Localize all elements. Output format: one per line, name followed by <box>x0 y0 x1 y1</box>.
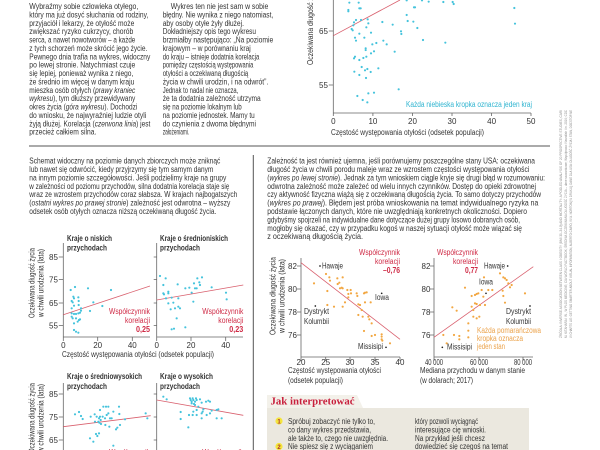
chart: main scatter of all countries: 10 <box>368 117 378 126</box>
text: tips: który pozwoli wyciągnąć <box>415 417 478 426</box>
chart: low income countries: Kraje o niskich <box>67 234 112 243</box>
chart: US states obesity vs life expectancy: –0,76 <box>383 266 400 275</box>
text: intro column left: żyją dłużej. Korelacja (czerwona linia) jest <box>29 119 151 128</box>
chart: low income countries: Współczynnik <box>109 307 151 316</box>
text: USA states paragraph: (wykres po prawej). Błędem jest próba wnioskowania na temat indywidualnego ryzyka na <box>267 199 539 208</box>
text: vertical credits <box>558 110 573 338</box>
text: intro column left: który ma już dosyć słuchania od rodziny, <box>29 10 148 19</box>
chart: upper-middle income countries: Kraje o średniowysokich <box>67 372 142 381</box>
chart: lower-middle income countries: przychodach <box>160 244 200 252</box>
chart: lower-middle income countries: Kraje o średnioniskich <box>160 234 228 243</box>
text: intro column right: Dokładniejszy opis tego wykresu <box>163 27 256 36</box>
chart: US states income vs life expectancy: 76 <box>422 331 431 340</box>
chart: US states income vs life expectancy: 40 000 <box>425 358 443 367</box>
chart: low income countries: 85 <box>49 253 58 262</box>
text: small multiples intro: odsetek osób otyłych oznacza niższą oczekiwaną długość życia. <box>29 207 216 216</box>
chart: US states income vs life expectancy: Iowa <box>479 278 493 286</box>
chart: low income countries: Oczekiwana długość życia <box>28 248 36 318</box>
chart: main scatter of all countries: 30 <box>448 117 457 126</box>
chart: main scatter of all countries <box>306 0 536 137</box>
text: USA states paragraph: podstawie łączonych danych, które nie uwzględniają konkretnych okoliczności. Dopiero <box>267 207 527 216</box>
text: tips: Spróbuj zobaczyć nie tylko to, <box>288 417 375 426</box>
text: vertical credits: W CHARTS LIE: GETTING SMARTER ABOUT VISUAL INFORMATION, ALBERTO CAIRO, W.W. NORTON [W DRUKU]; DANE DLA USA: DŁUGOŚĆ ŻYCIA I STAN, DOCSTOP.NE <box>568 110 573 338</box>
chart: upper-middle income countries: 65 <box>49 436 58 445</box>
chart: US states income vs life expectancy: Każda pomarańczowa <box>477 326 541 335</box>
chart: upper-middle income countries: 75 <box>49 413 58 422</box>
chart: US states income vs life expectancy: jeden stan <box>476 342 505 351</box>
chart: US states income vs life expectancy: Hawaje <box>484 262 505 270</box>
chart: US states income vs life expectancy <box>420 248 541 385</box>
text: USA states paragraph: Zależność ta jest również ujemna, jeśli porównujemy poszczególne stany USA: oczekiwana <box>267 156 535 166</box>
chart: lower-middle income countries: Współczynnik <box>202 307 244 316</box>
text: tips: Na przykład jeśli chcesz <box>415 434 485 443</box>
text: intro column right: pomiędzy częstością występowania <box>163 61 254 70</box>
chart: US states income vs life expectancy: 80 000 <box>514 358 532 367</box>
text: small multiples intro: (ostatni wykres po prawej stronie) zależność jest odwrotna – wyższy <box>29 199 230 208</box>
chart: US states income vs life expectancy: Missisipi <box>447 342 472 352</box>
chart: US states obesity vs life expectancy: 80 <box>288 285 297 294</box>
chart: high income countries: przychodach <box>160 382 200 391</box>
chart: US states obesity vs life expectancy: 82 <box>288 262 297 271</box>
text: vertical credits: M. KITAHARA I IN., W PLOS MEDICINE; CIA WORLD FACTBOOK; ŚREDNIA OCZEKIWANA DŁUGOŚĆ ŻYCIA – dane szacunkowe; Współpraca: Nasrullah i in. 2016; CDC <box>563 110 568 338</box>
chart: US states obesity vs life expectancy: Współczynnik <box>359 248 401 257</box>
text: USA states paragraph: gdybyśmy spojrzeli na indywidualne dane dotyczące dużej grupy losowo dobranych osób, <box>267 215 520 224</box>
text: small multiples intro: Schemat widoczny na poziomie danych zbiorczych może zniknąć <box>29 156 220 166</box>
text: intro column right: otyłości a oczekiwaną długością <box>163 69 249 78</box>
icon: number 1: 1 <box>277 419 281 425</box>
chart: US states obesity vs life expectancy: Częstość występowania otyłości <box>288 366 381 375</box>
chart: low income countries: 75 <box>49 276 58 284</box>
chart: US states obesity vs life expectancy: (odsetek populacji) <box>288 376 343 385</box>
chart: US states obesity vs life expectancy: Missisipi <box>358 342 383 351</box>
chart: US states income vs life expectancy: korelacji <box>453 257 478 266</box>
chart: US states obesity vs life expectancy: 40 <box>396 358 405 367</box>
text: small multiples intro: wraz ze wzrostem przychodów coraz słabsza. W krajach najbogatszych <box>28 190 237 199</box>
text: intro column left: zwiększać ryzyko cukrzycy, chorób <box>29 27 134 36</box>
text: intro column left: do wniosku, że najwyraźniej ludzie otyli <box>29 111 146 120</box>
text: intro column right: Jednak to nadal nie oznacza, <box>163 86 238 95</box>
text: tips: ale także to, czego nie uwzględnia. <box>288 434 388 443</box>
chart: main scatter of all countries: 0 <box>331 117 336 126</box>
text: intro column right: Wykres ten nie jest sam w sobie <box>171 2 269 11</box>
chart: US states income vs life expectancy: (w dolarach; 2017) <box>420 376 473 385</box>
text: tips <box>288 417 509 450</box>
text: small multiples intro: na innym poziomie szczegółowości. Jeśli podzielimy kraje na grupy <box>29 173 226 182</box>
text: intro column right: aby osoby otyłe żyły dłużej. <box>163 19 244 28</box>
chart: upper-middle income countries <box>28 372 151 450</box>
text: intro column left: z tych schorzeń może skrócić jego życie. <box>29 44 147 53</box>
text: USA states paragraph: długość życia w chwili porodu maleje wraz ze wzrostem częstości występowania otyłości <box>267 165 529 174</box>
chart: upper-middle income countries: 85 <box>49 390 58 399</box>
text: intro column left: Pewnego dnia trafia na wykres, widoczny <box>29 52 150 61</box>
divider <box>29 145 550 147</box>
text: intro column left: przecież całkiem silna. <box>29 128 96 137</box>
chart: US states obesity vs life expectancy: Oczekiwana długość życia <box>268 257 278 335</box>
text: intro column left: po lewej stronie. Natychmiast czuje <box>29 61 136 70</box>
text: intro column left: serca, a nawet nowotworów – a każde <box>29 36 136 44</box>
text: intro column right <box>163 2 274 137</box>
icon: number 2 <box>275 443 283 450</box>
chart: main scatter of all countries: Każda niebieska kropka oznacza jeden kraj <box>406 100 532 109</box>
chart: US states obesity vs life expectancy: 25 <box>321 358 331 367</box>
text: intro column left: wykresu), tym dłuższy przewidywany <box>29 94 135 103</box>
chart: lower-middle income countries: korelacji <box>218 316 243 325</box>
chart: main scatter of all countries: 20 <box>408 117 417 126</box>
chart: US states obesity vs life expectancy <box>268 248 405 385</box>
text: intro column left: przyjaciół i lekarzy, że otyłość może <box>29 19 135 28</box>
text: intro column right: do kraju – istnieje dodatnia korelacja <box>163 52 260 61</box>
chart: US states income vs life expectancy: kropka oznacza <box>477 334 523 343</box>
chart: US states obesity vs life expectancy: Dystrykt <box>304 307 330 316</box>
text: intro column right: że ta dodatnia zależność utrzyma <box>163 94 261 103</box>
chart: US states obesity vs life expectancy: 35 <box>371 358 380 367</box>
chart: main scatter of all countries: 40 <box>487 117 497 126</box>
text: USA states paragraph: czy aktywność fizyczna wiążą się z oczekiwaną długością życia. To samo dotyczy przychodów <box>267 190 541 199</box>
chart: upper-middle income countries: w chwili urodzenia (lata) <box>36 384 46 450</box>
chart: high income countries: Kraje o wysokich <box>160 372 213 381</box>
chart: low income countries: 55 <box>49 322 58 330</box>
text: intro column left: się lepiej, ponieważ wynika z niego, <box>29 69 133 78</box>
chart: lower-middle income countries: 20 <box>187 341 196 350</box>
icon: number 1 <box>275 417 283 425</box>
chart: US states obesity vs life expectancy: Iowa <box>375 293 389 302</box>
chart: US states income vs life expectancy: 80 <box>422 285 431 294</box>
text: USA states paragraph: odwrotna zależność może zależeć od wielu innych czynników. Dostęp do opieki zdrowotnej <box>267 182 536 191</box>
text: intro column right: założeniami. <box>163 128 189 137</box>
chart: low income countries: 65 <box>49 299 58 308</box>
text: tips: co dany wykres przedstawia, <box>288 425 371 434</box>
chart: US states income vs life expectancy: Kolumbii <box>506 317 531 326</box>
text: intro column right: krajowym – w porównaniu kraj <box>163 44 251 53</box>
text: intro column right: do czynienia z dwoma błędnymi <box>163 119 256 128</box>
chart: low income countries: w chwili urodzenia (lata) <box>36 249 46 318</box>
text: intro column left: Wybraźmy sobie człowieka otyłego, <box>29 2 138 11</box>
text: intro column left: okres życia (góra wykresu). Dochodzi <box>29 103 137 112</box>
chart: lower-middle income countries: 0 <box>154 341 159 350</box>
chart: low income countries: 40 <box>128 341 137 350</box>
chart: low income countries: 0 <box>61 341 66 350</box>
chart: lower-middle income countries: 40 <box>221 341 231 350</box>
chart: US states obesity vs life expectancy: 78 <box>288 308 297 317</box>
text: intro column right: na poziomie jednostek. Mamy tu <box>163 111 255 120</box>
text: intro column right: życia w chwili urodzin, i na odwrót”. <box>163 77 268 86</box>
text: intro column left: że średnio im więcej w danym kraju <box>29 77 134 86</box>
chart: US states obesity vs life expectancy: Hawaje <box>322 262 343 270</box>
chart: main scatter of all countries: 50 <box>527 117 536 126</box>
axis label: small multiples x axis: Częstość występowania otyłości (odsetek populacji) <box>62 350 214 359</box>
chart: lower-middle income countries: 0,23 <box>229 325 244 334</box>
chart: US states obesity vs life expectancy: 76 <box>288 331 297 340</box>
text: intro column right: błędny. Nie wynika z niego natomiast, <box>163 10 273 19</box>
text: USA states paragraph <box>267 156 545 241</box>
chart: US states obesity vs life expectancy: 20 <box>297 358 306 367</box>
chart: US states income vs life expectancy: Dystrykt <box>506 307 532 316</box>
chart: US states obesity vs life expectancy: Kolumbii <box>304 317 329 326</box>
chart: US states income vs life expectancy: Współczynnik <box>437 248 479 257</box>
chart: low income countries: 0,25 <box>136 325 150 334</box>
text: small multiples intro: w zależności od poziomu przychodów, silna dodatnia korelacja staje się <box>29 182 230 191</box>
chart: US states income vs life expectancy: Mediana przychodu w danym stanie <box>420 366 525 375</box>
text: tips: interesujące cię wnioski. <box>415 425 486 434</box>
text: intro column left <box>29 2 151 137</box>
chart: main scatter of all countries: 65 <box>319 27 328 36</box>
text: USA states paragraph: (wykres po lewej stronie). Jednak za tym wnioskiem ciągle kryje się drugi błąd w rozumowaniu: <box>267 173 545 182</box>
heading: box title: Jak interpretować <box>270 396 355 408</box>
chart: US states income vs life expectancy: 0,77 <box>465 266 478 275</box>
text: intro column right: się na poziomie lokalnym lub <box>163 103 242 112</box>
text: USA states paragraph: z oczekiwaną długością życia. <box>267 232 363 241</box>
text: small multiples intro <box>28 156 237 216</box>
chart: US states income vs life expectancy: 82 <box>422 262 431 271</box>
text: vertical credits: ŹRÓDŁA: INVERSE ASSOCIATION BETWEEN CLASS I OBESITY (BMI 30–34.9) AND MORTALITY: A POOLED ANALYSIS OF 20 PROSPECTIVE STUDIES, CARI <box>558 110 563 338</box>
text: USA states paragraph: mogłoby się okazać, czy w przypadku kogoś w naszej sytuacji otyłość może wiązać się <box>267 224 522 233</box>
chart: US states obesity vs life expectancy: w chwili urodzenia (lata) <box>278 259 286 334</box>
chart: upper-middle income countries: przychodach <box>67 382 107 391</box>
chart: lower-middle income countries <box>154 234 244 350</box>
chart: US states income vs life expectancy: 78 <box>422 308 431 317</box>
chart: main scatter of all countries: Częstość występowania otyłości (odsetek populacji) <box>331 128 484 137</box>
chart: low income countries: przychodach <box>67 244 107 252</box>
chart: main scatter of all countries: 55 <box>319 81 328 90</box>
panel: how to interpret <box>267 395 529 450</box>
chart: US states obesity vs life expectancy: korelacji <box>375 257 400 266</box>
chart: US states income vs life expectancy: 60 000 <box>470 358 488 367</box>
chart: low income countries <box>28 234 151 350</box>
chart: high income countries <box>154 372 244 450</box>
text: intro column left: mieszka osób otyłych (prawy kraniec <box>29 86 135 95</box>
text: small multiples intro: lub nawet się odwrócić, kiedy przyjrzymy się tym samym danym <box>29 165 214 174</box>
chart: low income countries: korelacji <box>125 316 150 325</box>
text: intro column right: brzmiałby następująco: „Na poziomie <box>163 36 274 44</box>
chart: low income countries: 20 <box>93 341 103 350</box>
chart: US states obesity vs life expectancy: 30 <box>346 358 355 367</box>
